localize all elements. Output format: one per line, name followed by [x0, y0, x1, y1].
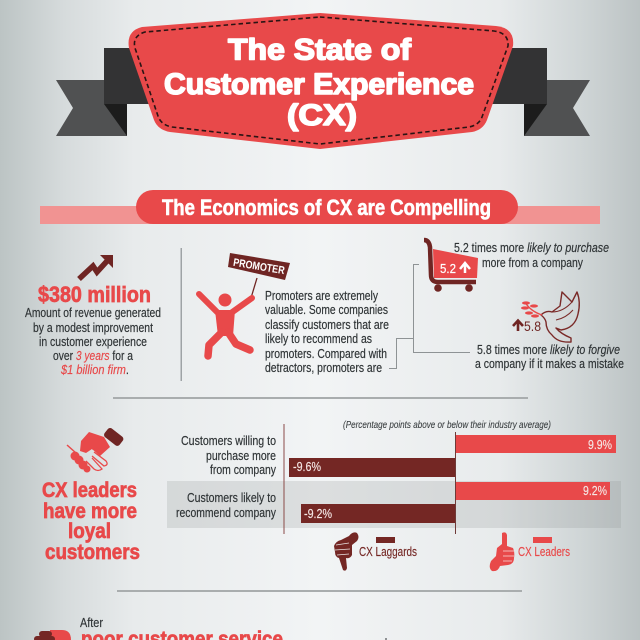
revenue description: $1 billion firm.: [60, 362, 129, 377]
ribbon: left: [56, 48, 164, 136]
section heading: CX leaders: customers: [45, 541, 140, 564]
promoter description: detractors, promoters are: [265, 360, 382, 375]
ribbon: right: [480, 48, 590, 136]
title text: The State of: [228, 34, 412, 66]
promoter description: classify customers that are: [265, 317, 389, 332]
purchase stat: 5.2 times more likely to purchase: [454, 240, 609, 255]
icon: dove with olive branch: [513, 292, 579, 342]
section heading: CX leaders: have more: [43, 500, 137, 523]
legend: CX Laggards: CX Laggards: [359, 544, 417, 559]
bars: [289, 432, 616, 534]
row labels: from company: [210, 462, 276, 477]
section heading: CX leaders: CX leaders: [42, 479, 137, 502]
icon: dove with olive branch: 5.8: [524, 318, 541, 334]
legend: CX Laggards: [334, 532, 417, 571]
connector lines: [389, 264, 470, 368]
icon: rising arrow: [79, 255, 113, 279]
icon: shopping cart: [424, 240, 478, 292]
bar values: -9.6%: [293, 459, 321, 474]
bar chart: loyalty: [167, 420, 621, 534]
bar values: 9.9%: [588, 437, 612, 452]
revenue description: over 3 years for a: [53, 348, 134, 363]
row labels: recommend company: [176, 505, 276, 520]
purchase stat: more from a company: [482, 255, 583, 270]
chart note: (Percentage points above or below their industry average): [343, 420, 551, 431]
icon: hand (cut off): [34, 630, 71, 640]
icon: promoter figure with sign: PROMOTER: [232, 257, 286, 277]
row labels: Customers willing to: [181, 433, 276, 448]
row labels: [176, 433, 276, 520]
revenue description: Amount of revenue generated: [25, 305, 161, 320]
promoter description: likely to recommend as: [265, 331, 372, 346]
bar values: [293, 437, 612, 521]
poor service heading: After: [80, 616, 103, 630]
bar values: 9.2%: [583, 483, 607, 498]
revenue stat: $380 million: [38, 282, 151, 307]
icon: thumbs down: [334, 532, 358, 571]
icon: promoter figure with sign: [199, 253, 290, 356]
section heading: CX leaders: loyal: [68, 520, 111, 543]
forgive stat: 5.8 times more likely to forgive: [477, 342, 620, 357]
promoter description: Promoters are extremely: [265, 288, 378, 303]
title text: Customer Experience: [164, 68, 474, 101]
legend: CX Leaders: CX Leaders: [518, 544, 570, 559]
revenue description: by a modest improvement: [33, 320, 153, 335]
title badge: [129, 13, 513, 149]
revenue description: in customer experience: [39, 334, 147, 349]
legend: CX Leaders: [490, 532, 570, 571]
promoter description: promoters. Compared with: [265, 346, 387, 361]
forgive stat: [475, 342, 624, 371]
title text: (CX): [287, 99, 357, 132]
revenue description: [25, 305, 161, 377]
icon: shopping cart: 5.2: [440, 261, 456, 276]
promoter description: valuable. Some companies: [265, 302, 388, 317]
section banner: [40, 190, 600, 224]
section heading: CX leaders: [42, 479, 140, 564]
poor service heading: [80, 616, 283, 640]
row labels: Customers likely to: [187, 490, 276, 505]
purchase stat: [454, 240, 609, 270]
promoter description: [265, 288, 389, 375]
icon: thumbs up: [490, 532, 514, 571]
icon: handshake: [67, 427, 125, 472]
revenue stat: [25, 282, 161, 377]
bar values: -9.2%: [304, 506, 332, 521]
title text: [164, 34, 474, 132]
row labels: purchase more: [206, 448, 276, 463]
section heading: The Economics of CX are Compelling: [162, 195, 491, 220]
